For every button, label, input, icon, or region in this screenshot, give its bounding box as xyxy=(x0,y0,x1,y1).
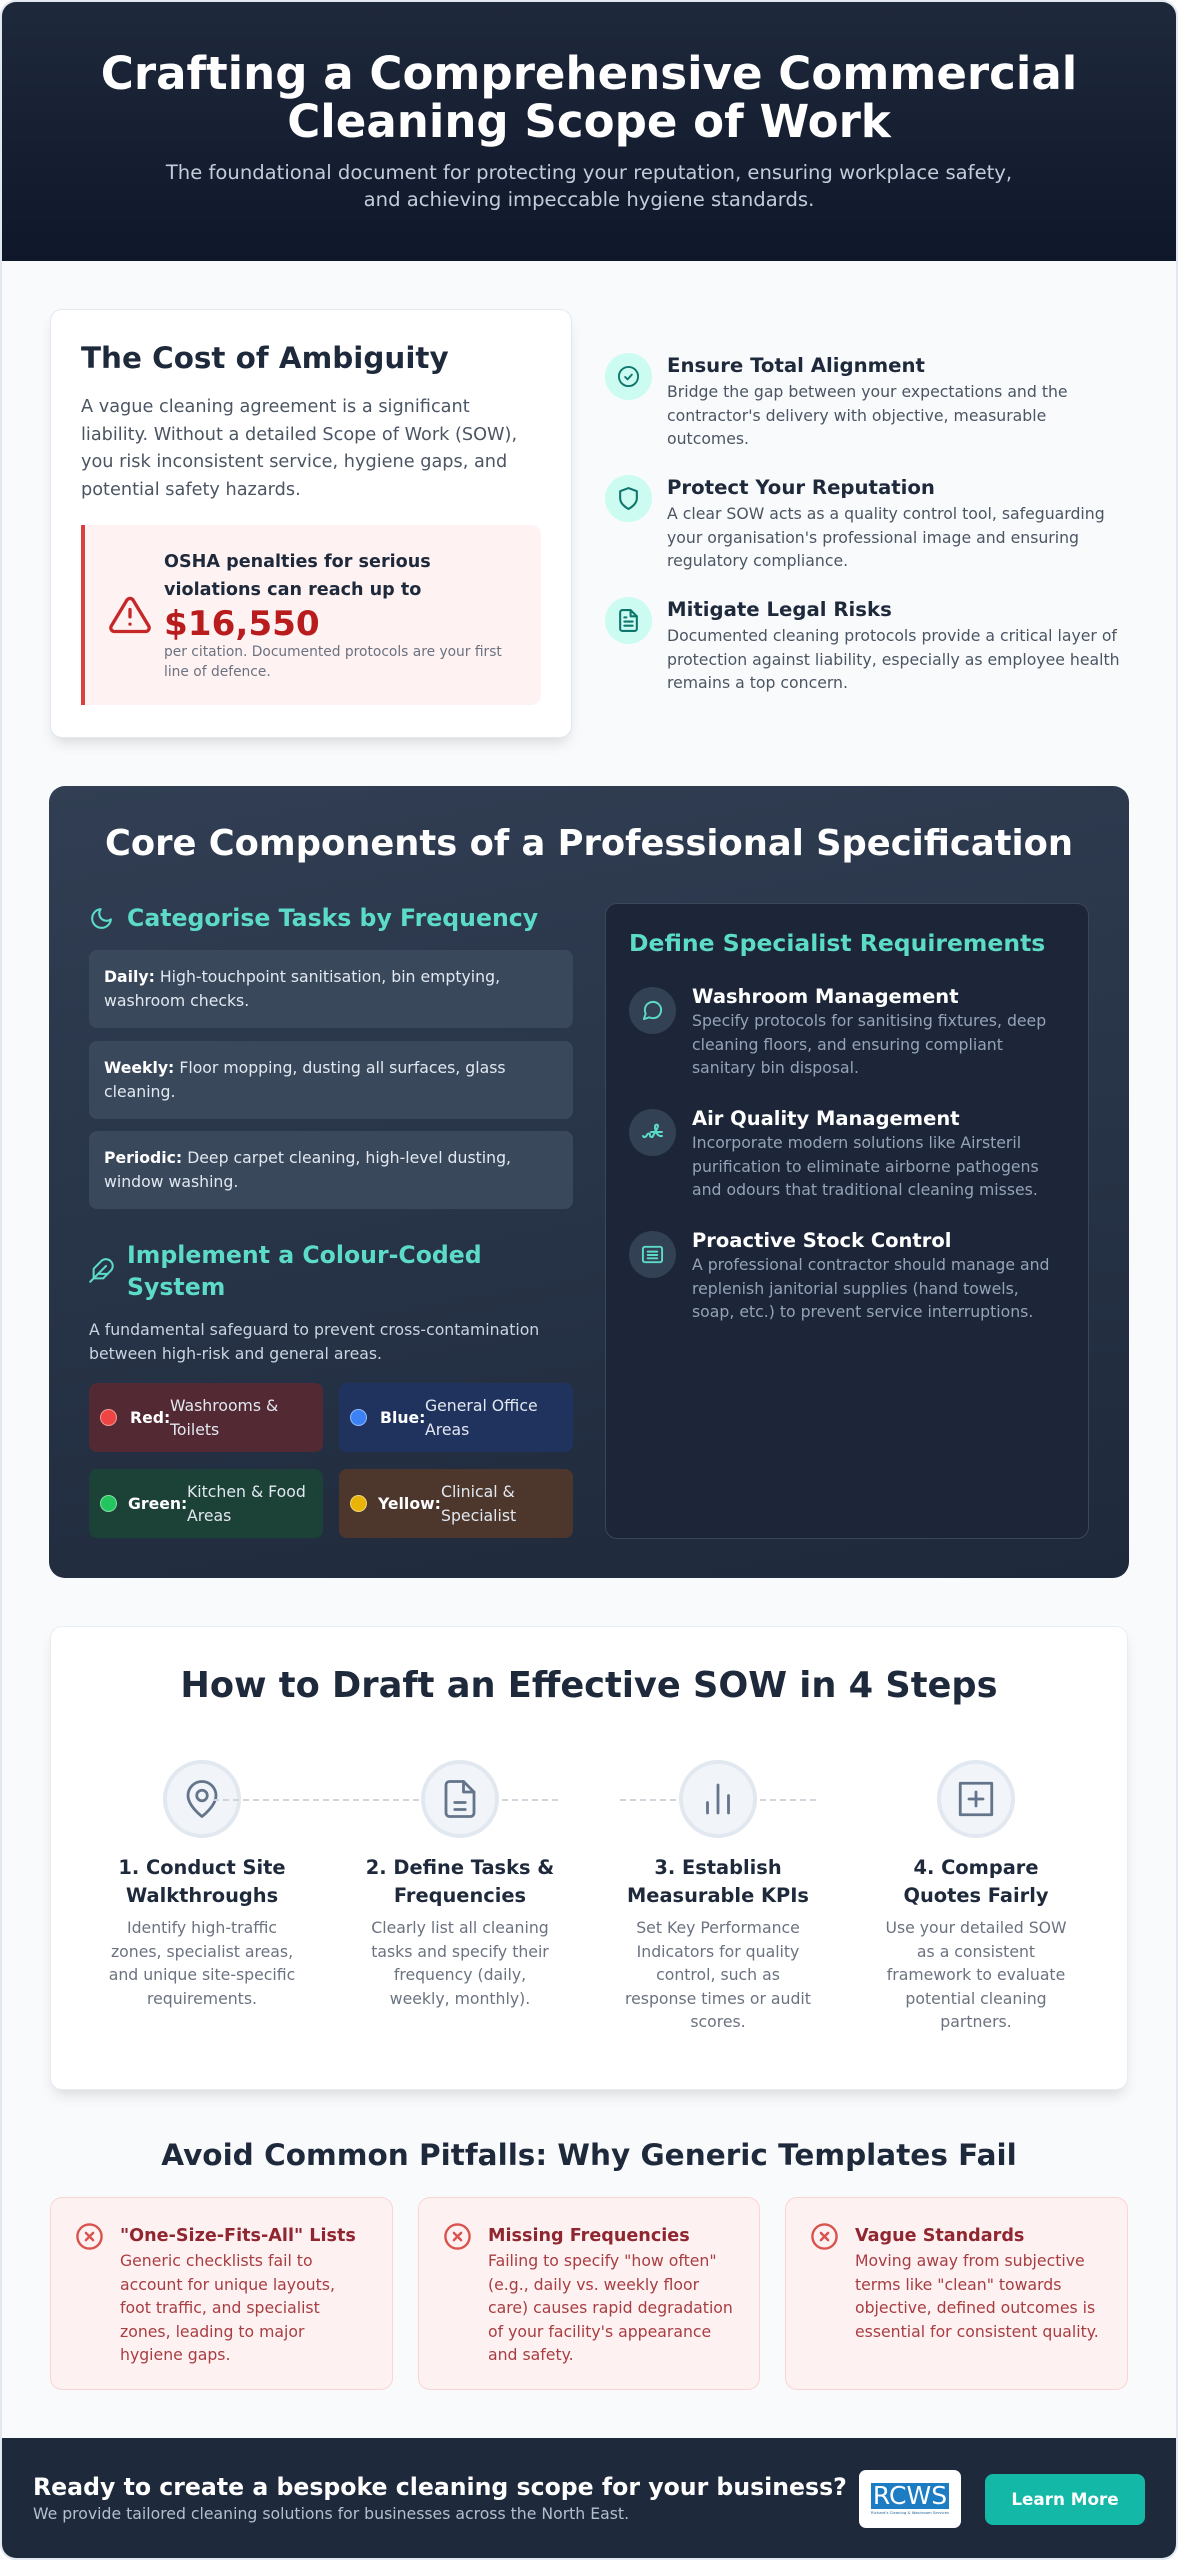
button: learn more: Learn More xyxy=(1011,2489,1119,2509)
step 1 text: requirements. xyxy=(147,1989,257,2008)
specialist text: Proactive Stock Control xyxy=(692,1229,951,1252)
icon: warning triangle xyxy=(109,596,151,634)
logo: RCWS: Richard's Cleaning & Washroom Services xyxy=(871,2510,949,2515)
specialist text: and odours that traditional cleaning misses. xyxy=(692,1180,1038,1199)
pitfall description: zones, leading to major xyxy=(120,2322,304,2341)
step 1 text: zones, specialist areas, xyxy=(111,1942,293,1961)
step 1 text: Identify high-traffic xyxy=(127,1918,277,1937)
step 2 text: Frequencies xyxy=(394,1884,526,1906)
intro paragraph xyxy=(81,397,517,500)
heading: categorise tasks: Categorise Tasks by Frequency xyxy=(127,904,538,932)
panel: steps xyxy=(50,1626,1128,2090)
pitfall description: terms like "clean" towards xyxy=(855,2275,1061,2294)
penalty lead text xyxy=(164,552,431,600)
colour system description: A fundamental safeguard to prevent cross-contamination xyxy=(89,1320,539,1339)
step 3 text: 3. Establish xyxy=(654,1856,782,1879)
heading: colour-coded system: System xyxy=(127,1272,225,1300)
icon: x circle xyxy=(444,2223,471,2250)
benefit text: contractor's delivery with objective, measurable xyxy=(667,406,1046,425)
icon: air swirl xyxy=(629,1109,676,1156)
step 4 text: Quotes Fairly xyxy=(903,1884,1048,1906)
task: weekly xyxy=(89,1041,573,1119)
specialist text: cleaning floors, and ensuring compliant xyxy=(692,1034,1003,1054)
benefit text xyxy=(667,476,1105,570)
step 4 text: framework to evaluate xyxy=(887,1965,1065,1984)
chip: green xyxy=(89,1469,323,1538)
specialist text: soap, etc.) to prevent service interruptions. xyxy=(692,1302,1033,1321)
panel: core components xyxy=(49,786,1129,1578)
step 4 text: potential cleaning xyxy=(905,1989,1047,2008)
pitfall description: (e.g., daily vs. weekly floor xyxy=(488,2275,699,2294)
specialist text: purification to eliminate airborne pathogens xyxy=(692,1156,1039,1176)
step 3 text: scores. xyxy=(690,2012,746,2031)
pitfall description: Moving away from subjective xyxy=(855,2251,1085,2270)
chip: blue: Areas xyxy=(425,1420,469,1438)
pitfall description xyxy=(120,2251,335,2364)
step 1 text: and unique site-specific xyxy=(109,1965,295,1984)
icon: speech bubble xyxy=(629,987,676,1034)
intro paragraph: you risk inconsistent service, hygiene gaps, and xyxy=(81,452,507,472)
specialist text: Air Quality Management xyxy=(692,1107,960,1130)
icon: x circle xyxy=(76,2223,103,2250)
benefit text: Ensure Total Alignment xyxy=(667,354,925,377)
subtitle xyxy=(166,161,1012,211)
pitfall title: Missing Frequencies xyxy=(488,2226,690,2246)
chip: blue: General Office xyxy=(425,1396,538,1415)
chip: green: Kitchen & Food xyxy=(187,1482,306,1501)
task: periodic: Periodic: Deep carpet cleaning, high-level dusting, xyxy=(104,1148,511,1167)
specialist: proactive stock control xyxy=(629,1229,1049,1321)
heading: pitfalls: Avoid Common Pitfalls: Why Generic Templates Fail xyxy=(161,2138,1017,2172)
panel: specialist requirements xyxy=(605,903,1089,1539)
step 4 text xyxy=(885,1856,1067,2031)
penalty lead text: OSHA penalties for serious xyxy=(164,552,431,572)
pitfall description: hygiene gaps. xyxy=(120,2345,230,2364)
step 3 text: control, such as xyxy=(656,1965,780,1984)
step 2 text xyxy=(366,1856,554,2008)
step 2 text: frequency (daily, xyxy=(394,1965,526,1984)
chip: green: Green: xyxy=(128,1494,187,1513)
callout: OSHA penalty xyxy=(81,525,541,705)
step 2 text: weekly, monthly). xyxy=(390,1989,530,2008)
task: weekly: cleaning. xyxy=(104,1082,175,1100)
pitfall description: care) causes rapid degradation xyxy=(488,2298,733,2317)
heading: core components: Core Components of a Professional Specification xyxy=(105,823,1073,864)
benefit text: regulatory compliance. xyxy=(667,551,848,570)
button: learn more xyxy=(985,2474,1145,2525)
heading: colour-coded system: Implement a Colour-Coded xyxy=(127,1241,482,1269)
step 2 text: tasks and specify their xyxy=(371,1942,549,1961)
specialist text: replenish janitorial supplies (hand towels, xyxy=(692,1278,1019,1298)
penalty amount: $16,550 xyxy=(164,604,320,644)
chip: yellow: Yellow: xyxy=(378,1494,441,1513)
pitfall description: account for unique layouts, xyxy=(120,2275,335,2294)
benefit text xyxy=(667,354,1068,448)
logo: RCWS: RCWS xyxy=(873,2481,947,2510)
specialist: air quality management xyxy=(629,1107,1039,1199)
pitfall: one-size-fits-all xyxy=(50,2197,393,2390)
benefit text: Bridge the gap between your expectations and the xyxy=(667,382,1068,401)
task: daily xyxy=(89,950,573,1028)
icon: moon xyxy=(91,908,112,929)
chip: yellow: Clinical & xyxy=(441,1482,515,1501)
step 3 text: response times or audit xyxy=(625,1989,811,2008)
title xyxy=(101,47,1077,148)
benefit: ensure total alignment xyxy=(605,353,1068,448)
footer band xyxy=(2,2438,1176,2558)
icon: x circle xyxy=(811,2223,838,2250)
step 2 text: Clearly list all cleaning xyxy=(371,1918,549,1937)
step 4 text: as a consistent xyxy=(917,1942,1035,1961)
pitfall: vague standards xyxy=(785,2197,1128,2390)
benefit text: Documented cleaning protocols provide a critical layer of xyxy=(667,626,1117,645)
task: weekly: Weekly: Floor mopping, dusting all surfaces, glass xyxy=(104,1058,506,1077)
icon: step 1 map pin xyxy=(163,1760,241,1838)
benefit text: A clear SOW acts as a quality control tool, safeguarding xyxy=(667,504,1105,523)
penalty note xyxy=(164,644,502,680)
icon: step 3 bars xyxy=(679,1760,757,1838)
task: periodic: window washing. xyxy=(104,1172,238,1190)
logo: RCWS xyxy=(859,2470,961,2528)
specialist text: sanitary bin disposal. xyxy=(692,1058,859,1077)
pitfall description: essential for consistent quality. xyxy=(855,2322,1099,2341)
benefit text: your organisation's professional image and ensuring xyxy=(667,528,1079,547)
pitfall: missing frequencies xyxy=(418,2197,760,2390)
task: periodic xyxy=(89,1131,573,1209)
specialist text xyxy=(692,985,1046,1077)
pitfall description: Failing to specify "how often" xyxy=(488,2251,717,2270)
pitfall description: and safety. xyxy=(488,2345,574,2364)
pitfall title: "One-Size-Fits-All" Lists xyxy=(120,2226,356,2246)
step 2 text: 2. Define Tasks & xyxy=(366,1856,554,1879)
pitfall description: objective, defined outcomes is xyxy=(855,2298,1095,2317)
step 1 text: 1. Conduct Site xyxy=(118,1856,286,1879)
specialist text xyxy=(692,1107,1039,1199)
step 3 text xyxy=(625,1856,811,2031)
benefit text: Protect Your Reputation xyxy=(667,476,935,499)
pitfall description: Generic checklists fail to xyxy=(120,2251,313,2270)
step 3 text: Indicators for quality xyxy=(637,1942,799,1961)
step 4 text: Use your detailed SOW xyxy=(885,1918,1067,1937)
penalty note: line of defence. xyxy=(164,664,271,680)
chip: yellow xyxy=(339,1469,573,1538)
footer description: We provide tailored cleaning solutions for businesses across the North East. xyxy=(33,2504,629,2523)
chip: blue: Blue: xyxy=(380,1408,425,1427)
benefit text: protection against liability, especially as employee health xyxy=(667,650,1120,669)
penalty lead text: violations can reach up to xyxy=(164,580,421,600)
task: daily: washroom checks. xyxy=(104,990,249,1010)
icon: shield xyxy=(605,475,652,522)
chip: red: Red: xyxy=(130,1408,170,1427)
chip: blue xyxy=(339,1383,573,1452)
pitfall description: foot traffic, and specialist xyxy=(120,2298,320,2317)
colour system description: between high-risk and general areas. xyxy=(89,1344,382,1363)
icon: step 2 document xyxy=(421,1760,499,1838)
benefit text: outcomes. xyxy=(667,429,749,448)
pitfall description xyxy=(855,2251,1099,2341)
header band xyxy=(2,2,1176,261)
colour system description xyxy=(89,1320,539,1363)
step 1 text: Walkthroughs xyxy=(126,1884,278,1906)
benefit text: Mitigate Legal Risks xyxy=(667,598,892,621)
icon: feather xyxy=(89,1258,114,1283)
icon: list box xyxy=(629,1231,676,1278)
step 1 text xyxy=(109,1856,295,2008)
specialist: washroom management xyxy=(629,985,1046,1077)
specialist text: Washroom Management xyxy=(692,985,959,1008)
chip: red: Washrooms & xyxy=(170,1396,278,1415)
icon: document xyxy=(605,597,652,644)
panel: cost of ambiguity xyxy=(50,309,572,738)
pitfall description xyxy=(488,2251,733,2364)
chip: yellow: Specialist xyxy=(441,1506,516,1524)
specialist text: Specify protocols for sanitising fixtures, deep xyxy=(692,1011,1046,1030)
heading: define specialist requirements: Define Specialist Requirements xyxy=(629,929,1045,957)
benefit: protect your reputation xyxy=(605,475,1105,570)
title: Cleaning Scope of Work xyxy=(287,94,891,148)
pitfall title: Vague Standards xyxy=(855,2226,1024,2246)
title: Crafting a Comprehensive Commercial xyxy=(101,47,1077,100)
step 4 text: partners. xyxy=(940,2012,1012,2031)
subtitle: The foundational document for protecting your reputation, ensuring workplace safety, xyxy=(166,161,1012,184)
icon: check circle xyxy=(605,353,652,400)
benefit text xyxy=(667,598,1120,692)
heading: steps: How to Draft an Effective SOW in 4 Steps xyxy=(180,1665,998,1706)
specialist text: A professional contractor should manage and xyxy=(692,1255,1049,1274)
task: daily: Daily: High-touchpoint sanitisation, bin emptying, xyxy=(104,967,500,986)
benefit text: remains a top concern. xyxy=(667,673,848,692)
specialist text: Incorporate modern solutions like Airsteril xyxy=(692,1133,1021,1152)
specialist text xyxy=(692,1229,1049,1321)
penalty note: per citation. Documented protocols are your first xyxy=(164,644,502,660)
chip: red xyxy=(89,1383,323,1452)
heading: colour-coded system xyxy=(127,1241,482,1300)
intro paragraph: A vague cleaning agreement is a significant xyxy=(81,397,470,417)
footer heading: Ready to create a bespoke cleaning scope for your business? xyxy=(33,2473,847,2501)
subtitle: and achieving impeccable hygiene standards. xyxy=(364,188,814,211)
chip: green: Areas xyxy=(187,1506,231,1524)
intro paragraph: liability. Without a detailed Scope of Work (SOW), xyxy=(81,424,517,444)
step 3 text: Set Key Performance xyxy=(636,1918,800,1937)
pitfall description: of your facility's appearance xyxy=(488,2322,711,2341)
intro paragraph: potential safety hazards. xyxy=(81,480,301,500)
icon: step 4 plus box xyxy=(937,1760,1015,1838)
chip: red: Toilets xyxy=(170,1420,219,1438)
step 4 text: 4. Compare xyxy=(913,1856,1039,1879)
benefit: mitigate legal risks xyxy=(605,597,1120,692)
step 3 text: Measurable KPIs xyxy=(627,1884,809,1906)
heading: the cost of ambiguity: The Cost of Ambiguity xyxy=(81,341,449,375)
